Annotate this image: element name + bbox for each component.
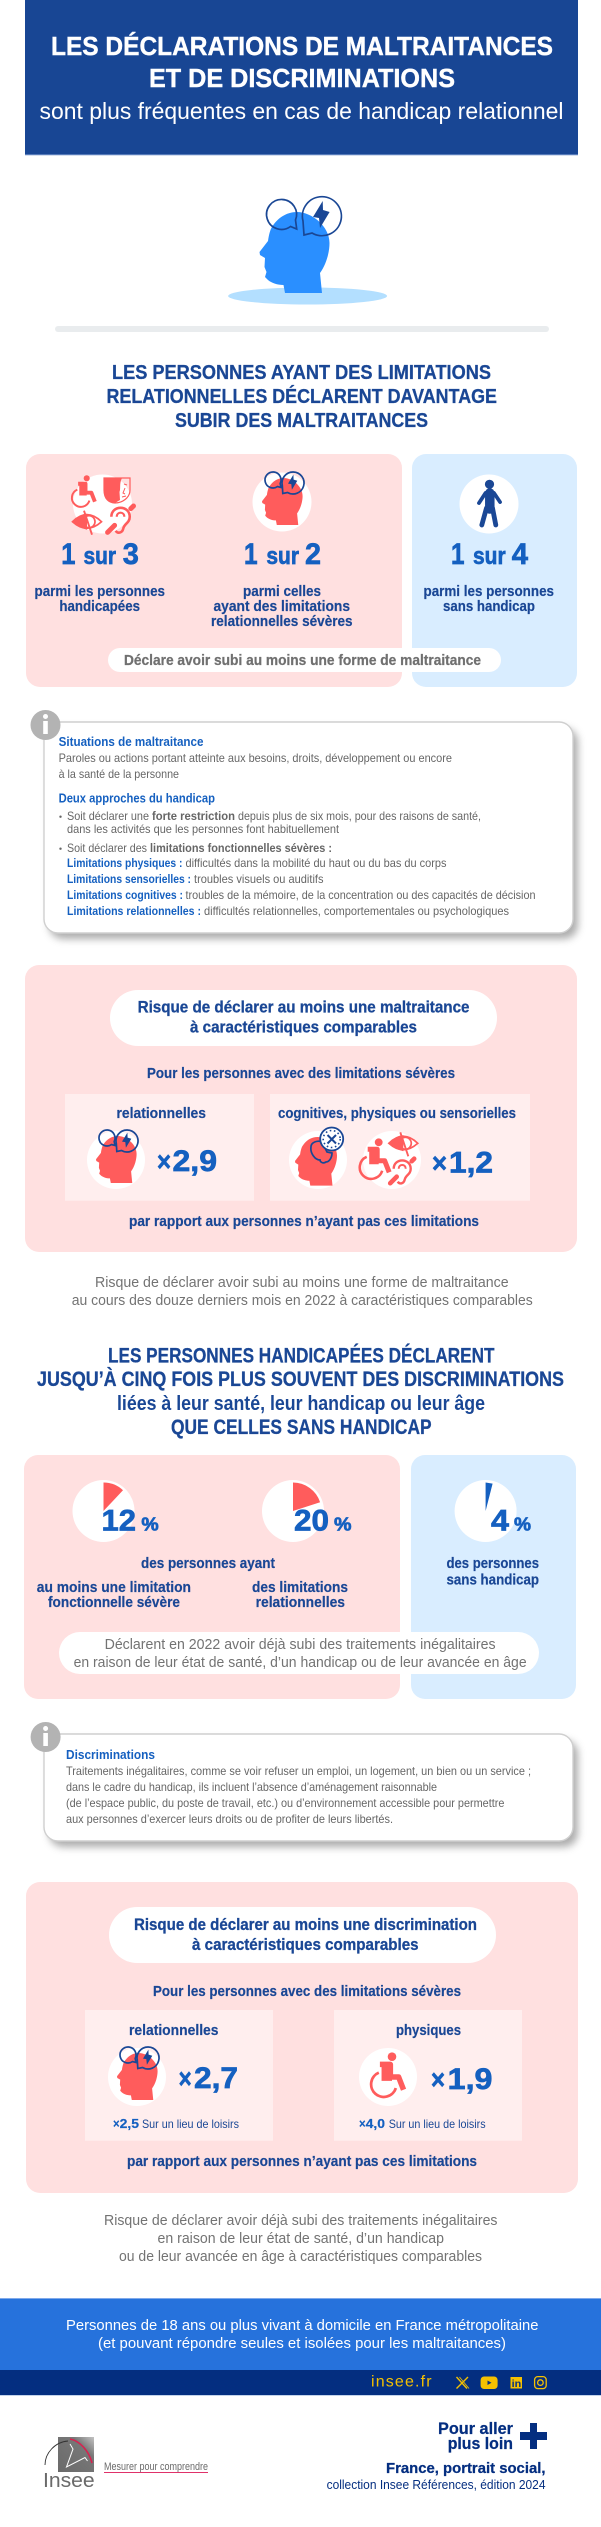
card: physiques: 1,9	[448, 2063, 492, 2096]
card: relationnelles: ×	[113, 2116, 120, 2131]
heading: discriminations: LES PERSONNES HANDICAPÉES DÉCLARENT	[108, 1345, 495, 1368]
note: discrimination: ou de leur avancée en âge à caractéristiques comparables	[119, 2248, 482, 2265]
card: relationnelles: 2,5	[120, 2116, 139, 2131]
card: relationnelles: relationnelles	[116, 1105, 206, 1122]
stat: limitations relationnelles sévères: ayant des limitations	[214, 598, 350, 615]
icon: Instagram	[535, 2377, 546, 2389]
info box: définitions: Situations de maltraitance	[59, 734, 203, 749]
icon: YouTube	[481, 2376, 498, 2389]
pour aller plus loin: plus loin	[448, 2434, 513, 2453]
info box: définitions: Limitations physiques :	[67, 856, 182, 870]
pie chart: 4 %: %	[514, 1515, 531, 1535]
note: discrimination: Risque de déclarer avoir déjà subi des traitements inégalitaires	[104, 2212, 498, 2229]
heading: discriminations: liées à leur santé, leur handicap ou leur âge	[117, 1393, 485, 1415]
panel heading pill: Risque de déclarer au moins une maltraitance	[138, 998, 470, 1017]
pie chart: 4 %	[455, 1480, 531, 1542]
stat: sans handicap: 1	[451, 538, 464, 571]
note: discrimination: en raison de leur état de santé, d’un handicap	[158, 2230, 444, 2247]
icon: LinkedIn: in	[512, 2379, 521, 2390]
pour aller plus loin: collection Insee Références, édition 2024	[327, 2477, 546, 2492]
pie chart: 20 %: 20	[294, 1505, 329, 1538]
stat: personnes handicapées: handicapées	[59, 598, 140, 615]
heading: maltraitances: SUBIR DES MALTRAITANCES	[175, 410, 428, 432]
info box: définitions: limitations fonctionnelles sévères :	[150, 841, 332, 855]
card: cognitives, physiques ou sensorielles: ×	[432, 1148, 447, 1179]
note: maltraitance: au cours des douze derniers mois en 2022 à caractéristiques comparables	[72, 1292, 533, 1309]
pie chart: 4 %: 4	[491, 1505, 509, 1538]
icon: LinkedIn	[510, 2377, 522, 2390]
card: relationnelles	[65, 1094, 254, 1201]
card: cognitives, physiques ou sensorielles	[270, 1094, 530, 1201]
panel: pourcentages de discrimination: des personnes ayant	[141, 1555, 275, 1572]
stat: limitations relationnelles sévères: sur	[266, 543, 299, 570]
panel: risque de discrimination: Pour les personnes avec des limitations sévères	[153, 1983, 461, 2000]
stat: personnes handicapées	[34, 474, 165, 615]
pie chart: 12 %: 12	[102, 1505, 136, 1538]
heading: discriminations	[37, 1345, 564, 1439]
card: cognitives, physiques ou sensorielles: 1,2	[449, 1147, 493, 1180]
panel: pourcentages de discrimination: fonctionnelle sévère	[48, 1594, 180, 1611]
pour aller plus loin: Pour aller	[438, 2419, 513, 2438]
stat: personnes handicapées: parmi les personnes	[34, 583, 165, 600]
card: physiques: ×	[431, 2064, 445, 2095]
stat: limitations relationnelles sévères: parmi celles	[243, 583, 321, 600]
title banner	[25, 0, 578, 155]
info box: discriminations	[31, 1722, 578, 1847]
logo: Insee	[43, 2437, 208, 2492]
stat: limitations relationnelles sévères	[211, 472, 353, 630]
info box: définitions: Soit déclarer des	[67, 841, 147, 855]
panel: pourcentages de discrimination: des personnes	[446, 1555, 539, 1572]
stat: sans handicap: sur	[473, 543, 506, 570]
panel: pourcentages de discrimination	[24, 1455, 576, 1699]
band: champ de l'étude: Personnes de 18 ans ou plus vivant à domicile en France métropolitaine	[66, 2317, 538, 2334]
info box: définitions: Limitations cognitives :	[67, 888, 183, 902]
heading: maltraitances: LES PERSONNES AYANT DES LIMITATIONS	[112, 362, 491, 384]
panel heading pill: à caractéristiques comparables	[192, 1935, 419, 1954]
info box: discriminations: (de l’espace public, du poste de travail, etc.) ou d’environnement accessible pour permettre	[66, 1796, 505, 1810]
panel: pourcentages de discrimination: au moins une limitation	[37, 1579, 191, 1596]
info box: discriminations: dans le cadre du handicap, ils incluent l’absence d’aménagement raisonnable	[66, 1780, 437, 1794]
caption pill: Déclare avoir subi au moins une forme de maltraitance	[124, 652, 481, 669]
info box: définitions: dans les activités que les personnes font habituellement	[67, 822, 340, 836]
pour aller plus loin: France, portrait social,	[386, 2460, 546, 2477]
band: insee.fr et réseaux sociaux	[0, 2370, 601, 2396]
card: physiques: Sur un lieu de loisirs	[389, 2117, 486, 2131]
panel heading pill: Risque de déclarer au moins une discrimination	[134, 1915, 477, 1934]
icon: info	[31, 1722, 61, 1752]
caption pill: Déclarent en 2022 avoir déjà subi des traitements inégalitaires	[105, 1636, 496, 1653]
stat: sans handicap: 4	[512, 538, 528, 571]
panel heading pill	[109, 1907, 496, 1963]
band: insee.fr et réseaux sociaux: insee.fr	[371, 2374, 432, 2391]
heading: discriminations: QUE CELLES SANS HANDICAP	[171, 1416, 432, 1439]
panel: risque de discrimination: par rapport aux personnes n’ayant pas ces limitations	[127, 2153, 477, 2170]
caption pill	[108, 648, 501, 672]
panel: risque de maltraitance: Pour les personnes avec des limitations sévères	[147, 1065, 455, 1082]
band: champ de l'étude: (et pouvant répondre seules et isolées pour les maltraitances)	[98, 2335, 506, 2352]
panel: pourcentages de discrimination: sans handicap	[446, 1572, 539, 1589]
panel: risque de discrimination	[26, 1882, 578, 2193]
info box: définitions: Limitations sensorielles :	[67, 872, 191, 886]
card: relationnelles: 2,9	[172, 1145, 217, 1178]
panel: pourcentages de discrimination: des limitations	[252, 1579, 348, 1596]
stat: personnes handicapées: 1	[61, 538, 76, 571]
logo: Insee: Insee	[43, 2470, 95, 2492]
pie chart: 12 %	[72, 1480, 159, 1542]
card: relationnelles: Sur un lieu de loisirs	[142, 2117, 239, 2131]
caption pill: en raison de leur état de santé, d’un handicap ou de leur avancée en âge	[74, 1654, 527, 1671]
panel: 1 sur N maltraitance	[26, 454, 577, 687]
note: maltraitance	[72, 1274, 533, 1309]
info box: définitions	[30, 710, 578, 939]
info box: discriminations: aux personnes d’exercer leurs droits ou de profiter de leurs libertés.	[66, 1812, 393, 1826]
card: physiques	[334, 2010, 522, 2141]
stat: sans handicap: parmi les personnes	[424, 583, 554, 600]
stat: limitations relationnelles sévères: 1	[244, 538, 258, 571]
panel heading pill: à caractéristiques comparables	[190, 1018, 417, 1037]
stat: sans handicap: sans handicap	[443, 598, 535, 615]
icon: head with speech bubbles	[228, 197, 387, 304]
icon: plus	[520, 2423, 547, 2449]
info box: définitions: Soit déclarer une	[67, 809, 149, 823]
panel: pourcentages de discrimination: relationnelles	[256, 1594, 345, 1611]
info box: définitions: Limitations relationnelles :	[67, 904, 201, 918]
icon: X	[456, 2377, 469, 2388]
info box: définitions: troubles visuels ou auditifs	[194, 872, 324, 886]
stat: limitations relationnelles sévères: 2	[305, 538, 321, 571]
title banner: ET DE DISCRIMINATIONS	[149, 63, 455, 93]
note: discrimination	[104, 2212, 498, 2265]
heading: maltraitances	[106, 362, 497, 432]
stat: limitations relationnelles sévères: relationnelles sévères	[211, 613, 353, 630]
heading: maltraitances: RELATIONNELLES DÉCLARENT DAVANTAGE	[106, 385, 497, 408]
info box: discriminations: Traitements inégalitaires, comme se voir refuser un emploi, un logement, un bien ou un service ;	[66, 1764, 531, 1778]
stat: sans handicap	[424, 474, 554, 615]
card: physiques: physiques	[396, 2022, 461, 2039]
info box: définitions: forte restriction	[152, 809, 235, 823]
card: cognitives, physiques ou sensorielles: cognitives, physiques ou sensorielles	[278, 1105, 516, 1122]
info box: discriminations: Discriminations	[66, 1747, 155, 1762]
icon: info	[30, 710, 60, 740]
card: physiques: 4,0	[366, 2116, 385, 2131]
info box: définitions: depuis plus de six mois, pour des raisons de santé,	[238, 809, 481, 823]
stat: personnes handicapées: 3	[123, 538, 139, 571]
card: relationnelles: ×	[157, 1146, 171, 1177]
card: relationnelles: relationnelles	[129, 2022, 218, 2039]
card: relationnelles	[85, 2010, 273, 2141]
pie chart: 20 %: %	[334, 1515, 352, 1535]
info box: définitions: à la santé de la personne	[59, 767, 179, 781]
pie chart: 12 %: %	[141, 1515, 159, 1535]
band: champ de l'étude	[0, 2298, 601, 2370]
card: physiques: ×	[359, 2116, 366, 2131]
title banner: LES DÉCLARATIONS DE MALTRAITANCES	[51, 31, 553, 61]
info box: définitions: troubles de la mémoire, de la concentration ou des capacités de décision	[186, 888, 536, 902]
caption pill	[59, 1632, 539, 1674]
title banner: sont plus fréquentes en cas de handicap relationnel	[40, 98, 564, 124]
card: relationnelles: ×	[179, 2063, 192, 2094]
info box: définitions: Deux approches du handicap	[59, 791, 215, 806]
logo: Insee: Mesurer pour comprendre	[104, 2461, 208, 2473]
info box: définitions: difficultés relationnelles, comportementales ou psychologiques	[204, 904, 509, 918]
note: maltraitance: Risque de déclarer avoir subi au moins une forme de maltraitance	[95, 1274, 509, 1291]
panel: risque de maltraitance	[25, 965, 577, 1252]
info box: définitions: difficultés dans la mobilité du haut ou du bas du corps	[186, 856, 446, 870]
info box: définitions: Paroles ou actions portant atteinte aux besoins, droits, développement ou encore	[59, 751, 452, 765]
pour aller plus loin	[327, 2419, 547, 2492]
card: relationnelles: 2,7	[194, 2062, 238, 2095]
panel heading pill	[110, 990, 497, 1046]
panel: risque de maltraitance: par rapport aux personnes n’ayant pas ces limitations	[129, 1213, 479, 1230]
pie chart: 20 %	[262, 1480, 352, 1542]
stat: personnes handicapées: sur	[84, 543, 116, 570]
